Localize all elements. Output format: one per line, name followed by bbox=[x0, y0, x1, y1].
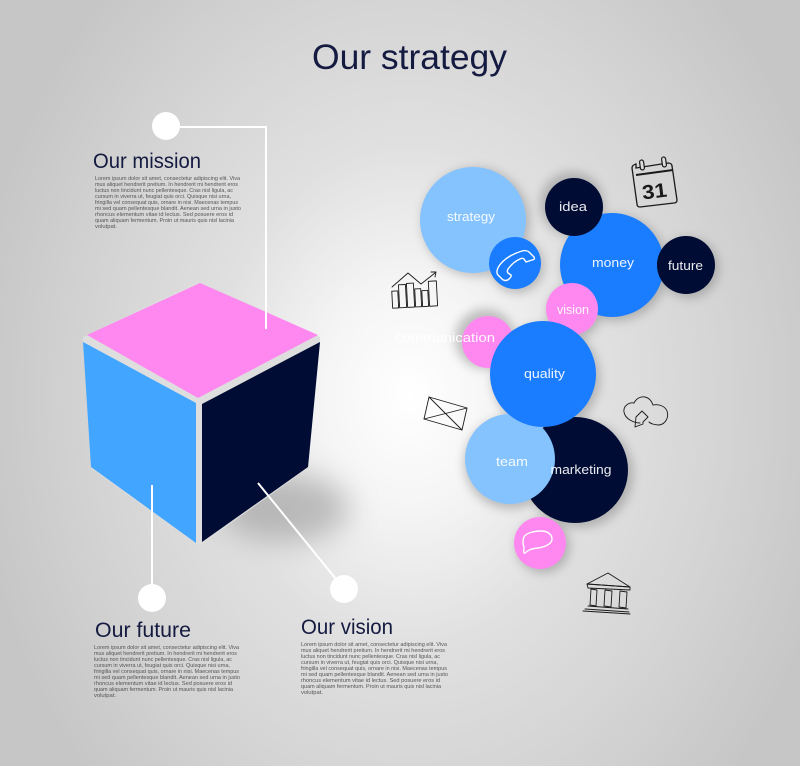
bubble: communication: communication bbox=[395, 331, 495, 345]
paragraph: our mission: quam aliquam fermentum. Proin ut mauris quis nisl lacinia bbox=[95, 218, 234, 224]
paragraph: our mission: rhoncus elementum vitae id lectus. Sed posuere eros id bbox=[95, 212, 233, 218]
bubble: vision: vision bbox=[557, 303, 589, 317]
node: future bbox=[138, 584, 166, 612]
paragraph: our vision: rhoncus elementum vitae id lectus. Sed posuere eros id bbox=[301, 678, 440, 684]
paragraph: our vision: cursum in viverra ut, feugiat quis orci. Quisque nisi urna, bbox=[301, 660, 438, 666]
paragraph: our vision: fringilla vel consequat quis, ornare in nisi. Maecenas tempus bbox=[301, 666, 447, 672]
icon: speech bubble bbox=[523, 531, 552, 553]
paragraph: our mission: Lorem ipsum dolor sit amet, consectetur adipiscing elit. Viva bbox=[95, 176, 240, 182]
bubble: strategy: strategy bbox=[447, 210, 496, 224]
paragraph: our vision: luctus non tincidunt nunc pellentesque. Cras nisl ligula, ac bbox=[301, 654, 440, 660]
text block: our future bbox=[94, 618, 240, 699]
paragraph: our vision: quam aliquam fermentum. Proin ut mauris quis nisl lacinia bbox=[301, 684, 441, 690]
cube left face bbox=[83, 342, 196, 543]
icon: growth chart bbox=[391, 272, 438, 308]
icon: cloud bbox=[624, 397, 668, 427]
bubble: team: team bbox=[496, 455, 528, 469]
icon: bank bbox=[583, 573, 630, 614]
paragraph: our mission: mus aliquet hendrerit pretium. In hendrerit mi hendrerit eros bbox=[95, 182, 238, 188]
bubble: money bbox=[560, 213, 664, 317]
cube body bbox=[83, 281, 320, 546]
bubble: communication bbox=[395, 316, 514, 368]
bubble: quality: quality bbox=[524, 367, 566, 381]
bubble: money: money bbox=[592, 256, 635, 270]
bubble: vision bbox=[546, 283, 598, 335]
connector: mission bbox=[152, 112, 266, 329]
paragraph: our vision: mus aliquet hendrerit pretium. In hendrerit mi hendrerit eros bbox=[301, 648, 445, 654]
label: marketing: marketing bbox=[550, 463, 612, 477]
paragraph: our vision: volutpat. bbox=[301, 690, 323, 696]
paragraph: our future: cursum in viverra ut, feugiat quis orci. Quisque nisi urna, bbox=[94, 663, 230, 669]
paragraph: our future: fringilla vel consequat quis, ornare in nisi. Maecenas tempus bbox=[94, 669, 239, 675]
paragraph: our mission bbox=[95, 176, 241, 230]
cube top face bbox=[87, 283, 318, 398]
heading: our vision: Our vision bbox=[301, 615, 393, 639]
node: mission bbox=[152, 112, 180, 140]
connector: future bbox=[138, 485, 166, 612]
text block: our mission bbox=[93, 149, 241, 230]
paragraph: our future: rhoncus elementum vitae id lectus. Sed posuere eros id bbox=[94, 681, 232, 687]
icon: calendar: 31 bbox=[641, 180, 668, 205]
bubble: idea bbox=[545, 178, 603, 236]
paragraph: our future bbox=[94, 645, 240, 699]
bubble: strategy bbox=[420, 167, 526, 273]
paragraph: our mission: volutpat. bbox=[95, 224, 117, 230]
paragraph: our vision bbox=[301, 642, 448, 696]
bubble: quality bbox=[490, 321, 596, 427]
icon: calendar bbox=[632, 157, 677, 207]
bubble: future bbox=[657, 236, 715, 294]
cube right face bbox=[202, 342, 320, 542]
paragraph: our future: mus aliquet hendrerit pretium. In hendrerit mi hendrerit eros bbox=[94, 651, 237, 657]
heading: our future: Our future bbox=[95, 618, 191, 642]
cube with shadow bbox=[83, 281, 349, 546]
bubble: idea: idea bbox=[559, 200, 587, 214]
paragraph: our vision: mi sed quam pellentesque blandit. Aenean sed urna in justo bbox=[301, 672, 448, 678]
paragraph: our mission: fringilla vel consequat quis, ornare in nisi. Maecenas tempus bbox=[95, 200, 238, 206]
text block: our vision bbox=[301, 615, 448, 696]
paragraph: our future: quam aliquam fermentum. Proin ut mauris quis nisl lacinia bbox=[94, 687, 233, 693]
icon: phone bbox=[497, 251, 534, 280]
cube shadow bbox=[221, 474, 349, 542]
paragraph: our mission: luctus non tincidunt nunc pellentesque. Cras nisl ligula, ac bbox=[95, 188, 233, 194]
title: Our strategy bbox=[312, 38, 507, 77]
bubble: chat bbox=[514, 517, 566, 569]
bubble: team bbox=[465, 414, 555, 504]
bubble: marketing bbox=[522, 417, 628, 523]
heading: our mission: Our mission bbox=[93, 149, 201, 173]
paragraph: our future: mi sed quam pellentesque blandit. Aenean sed urna in justo bbox=[94, 675, 240, 681]
connector: vision bbox=[258, 483, 358, 603]
paragraph: our mission: mi sed quam pellentesque blandit. Aenean sed urna in justo bbox=[95, 206, 241, 212]
node: vision bbox=[330, 575, 358, 603]
bubble: phone bbox=[489, 237, 541, 289]
bubble shadows bbox=[422, 168, 719, 573]
bubble cluster bbox=[395, 167, 719, 573]
paragraph: our future: luctus non tincidunt nunc pellentesque. Cras nisl ligula, ac bbox=[94, 657, 232, 663]
paragraph: our future: volutpat. bbox=[94, 693, 116, 699]
icon: envelope bbox=[424, 397, 467, 430]
paragraph: our mission: cursum in viverra ut, feugiat quis orci. Quisque nisi urna, bbox=[95, 194, 231, 200]
paragraph: our future: Lorem ipsum dolor sit amet, consectetur adipiscing elit. Viva bbox=[94, 645, 239, 651]
bubble: future: future bbox=[668, 259, 703, 273]
paragraph: our vision: Lorem ipsum dolor sit amet, consectetur adipiscing elit. Viva bbox=[301, 642, 447, 648]
